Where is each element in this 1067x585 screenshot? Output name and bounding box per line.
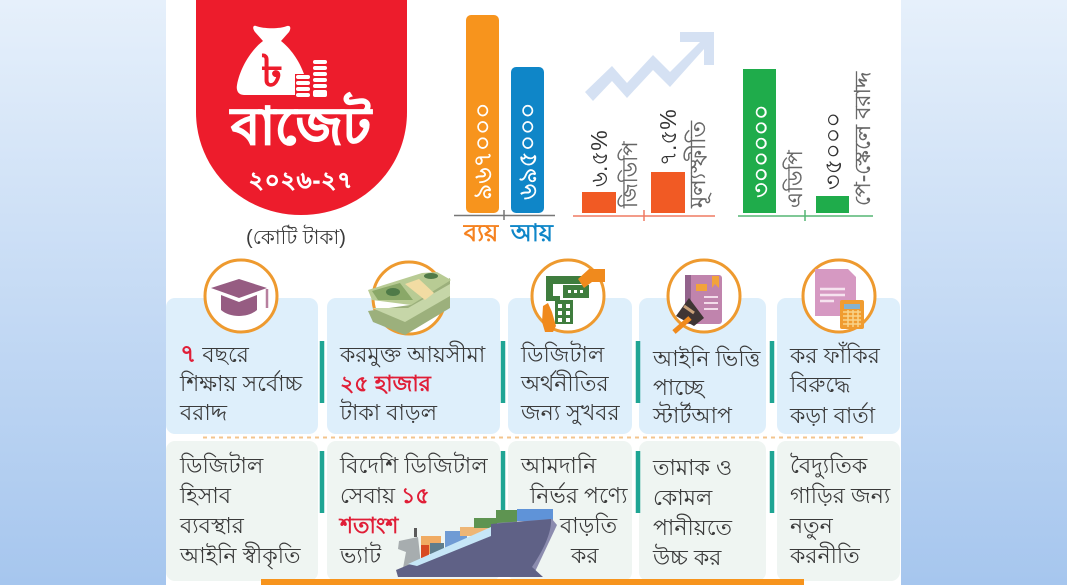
text: tax evasion: বিরুদ্ধে	[789, 372, 851, 397]
text: tax free income limit: করমুক্ত আয়সীমা	[339, 341, 486, 368]
icon: money bag: ৳	[261, 47, 283, 96]
text: startups: স্টার্টআপ	[652, 402, 733, 428]
text: digital accounting: ডিজিটাল	[179, 452, 264, 478]
text: foreign digital services: ১৫	[401, 483, 430, 508]
text: electric vehicles: করনীতি	[789, 542, 860, 568]
text: education allocation: শিক্ষায় সর্বোচ্চ	[179, 370, 303, 396]
text: import dependent goods: কর	[570, 543, 599, 568]
text: education allocation: বছরে	[196, 342, 250, 367]
text: education allocation: বরাদ্দ	[179, 400, 228, 425]
text: digital economy: ডিজিটাল	[520, 341, 605, 367]
chart: GDP and inflation: মূল্যস্ফীতি	[684, 120, 711, 209]
text: foreign digital services: শতাংশ	[338, 513, 399, 538]
text: startups: আইনি ভিত্তি	[652, 346, 762, 371]
chart: ADP and pay scale: পে-স্কেলে বরাদ্দ	[850, 71, 875, 206]
chart: GDP and inflation: জিডিপি	[618, 141, 642, 209]
chart: expenditure and income: ব্যয়	[463, 220, 499, 247]
icon: banknote stack	[368, 262, 451, 335]
text: startups: পাচ্ছে	[653, 375, 706, 400]
text: education allocation: ৭	[180, 340, 196, 368]
icon: graduation cap	[205, 260, 277, 332]
text: electric vehicles: গাড়ির জন্য	[790, 483, 891, 508]
text: digital accounting: ব্যবস্থার	[179, 513, 245, 538]
text: import dependent goods: আমদানি	[520, 453, 597, 478]
title text: বাজেট	[229, 93, 373, 156]
icon: tax document and calculator	[803, 260, 875, 332]
icon: container ship	[396, 509, 557, 577]
arrow: rising trend	[585, 32, 714, 101]
text: foreign digital services: বিদেশি ডিজিটাল	[339, 452, 488, 478]
text: electric vehicles: নতুন	[789, 513, 834, 540]
text: digital economy: অর্থনীতির	[520, 370, 610, 396]
text: tobacco and soft drinks: উচ্চ কর	[652, 544, 722, 570]
panel: card row two backgrounds	[166, 441, 900, 581]
chart: expenditure and income: ৬৯৫০০০	[514, 103, 542, 200]
budget logo shield	[196, 0, 407, 215]
text: tobacco and soft drinks: তামাক ও	[652, 455, 732, 480]
text: digital economy: জন্য সুখবর	[520, 400, 621, 426]
text: tobacco and soft drinks: পানীয়তে	[653, 514, 733, 540]
icon: money bag	[237, 26, 327, 97]
panel: card row one backgrounds	[166, 298, 900, 434]
text: tax free income limit: ২৫ হাজার	[340, 371, 432, 396]
chart: ADP and pay scale: এডিপি	[783, 150, 807, 208]
chart: expenditure and income: আয়	[510, 220, 554, 247]
bottom orange bar	[261, 579, 804, 585]
chart: GDP and inflation: ৭.৫%	[655, 109, 681, 166]
text: tax evasion: কর ফাঁকির	[789, 342, 881, 368]
chart: ADP and pay scale: ৩৫০০০	[820, 112, 847, 190]
text: electric vehicles: বৈদ্যুতিক	[790, 453, 868, 479]
year: ২০২৬-২৭	[249, 167, 353, 193]
text: tobacco and soft drinks: কোমল	[653, 485, 713, 510]
chart: GDP and inflation	[573, 109, 715, 221]
text: import dependent goods: বাড়তি	[559, 513, 618, 538]
text: tax evasion: কড়া বার্তা	[789, 402, 876, 428]
chart: expenditure and income	[454, 15, 555, 247]
text: tax free income limit: টাকা বাড়ল	[339, 399, 438, 425]
text: foreign digital services: সেবায়	[340, 483, 401, 508]
unit label: (কোটি টাকা)	[246, 225, 346, 249]
chart: ADP and pay scale: ৩০০০০০	[748, 104, 775, 198]
text: digital accounting: হিসাব	[179, 483, 232, 508]
icon: law book and gavel	[668, 260, 740, 332]
icon: digital payment	[532, 260, 605, 332]
text: foreign digital services: ভ্যাট	[339, 542, 382, 568]
text: digital accounting: আইনি স্বীকৃতি	[179, 542, 301, 569]
text: import dependent goods: নির্ভর পণ্যে	[529, 482, 628, 508]
chart: GDP and inflation: ৬.৫%	[586, 130, 612, 187]
chart: expenditure and income: ৯৬৭০০০	[469, 102, 497, 200]
chart: ADP and pay scale	[738, 69, 875, 221]
